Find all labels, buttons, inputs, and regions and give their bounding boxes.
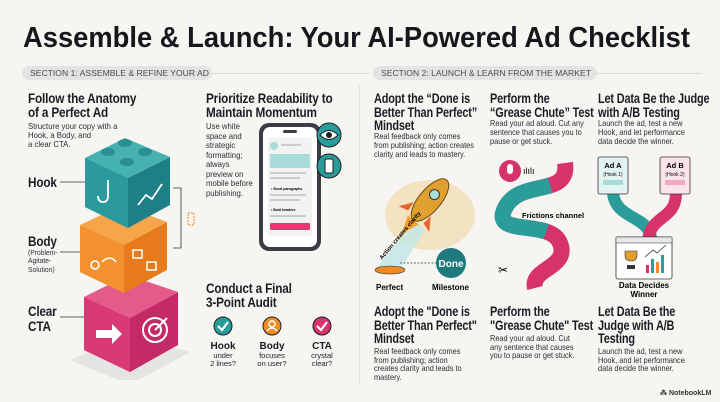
heading: chute	[490, 90, 594, 120]
heading: chute repeat: Perform the	[490, 303, 550, 319]
chart: a/b split: Data Decides	[619, 281, 670, 290]
icon: hook check: 2 lines?	[210, 359, 236, 368]
label: clear CTA: CTA	[28, 318, 51, 334]
heading: anatomy	[28, 90, 136, 120]
panel: anatomy	[28, 90, 136, 334]
text: done repeat: creates clarity and leads to	[374, 364, 462, 373]
heading: chute: Perform the	[490, 90, 550, 106]
heading: chute: “Grease Chute” Test	[490, 104, 594, 120]
section 1 header: SECTION 1: ASSEMBLE & REFINE YOUR AD	[30, 68, 209, 78]
heading: done: Better Than Perfect”	[374, 104, 477, 120]
icon: CTA check	[311, 316, 333, 368]
text: chute: Read your ad aloud. Cut any	[490, 119, 584, 128]
heading: audit	[206, 280, 292, 310]
text: done repeat: from publishing; action	[374, 356, 448, 365]
chart: a/b split: Ad A	[604, 161, 622, 170]
text: chute repeat: any sentence that causes	[490, 343, 574, 352]
heading: done repeat: Adopt the "Done is	[374, 303, 470, 319]
label: body: Agitate-	[28, 256, 51, 265]
heading: done repeat: Better Than Perfect"	[374, 316, 477, 332]
label: body: (Problem-	[28, 248, 58, 256]
text: chute: pause or get stuck.	[490, 137, 552, 146]
text: ab repeat: Launch the ad, test a new	[598, 347, 682, 356]
icon: phone mockup: • Bold headers	[271, 208, 295, 212]
chart: a/b split: Ad B	[666, 161, 684, 170]
label: hook: Hook	[28, 174, 57, 190]
heading: chute repeat: "Grease Chute" Test	[490, 316, 593, 332]
chart: chute: ılılı	[523, 166, 535, 176]
panel: done mindset repeat	[374, 303, 477, 382]
label: body: Solution)	[28, 264, 55, 274]
heading: ab repeat: Testing	[598, 330, 635, 346]
panel: audit	[206, 280, 333, 368]
text: readability: space and	[206, 130, 242, 140]
heading: readability: Maintain Momentum	[206, 104, 317, 120]
text: done repeat: mastery.	[374, 373, 402, 382]
text: readability: always	[206, 159, 230, 169]
heading: anatomy: Follow the Anatomy	[28, 90, 136, 106]
heading: readability: Prioritize Readability to	[206, 90, 332, 106]
text: readability: mobile before	[206, 178, 253, 188]
text: ab repeat: data decide the winner.	[598, 364, 674, 373]
text: anatomy: a clear CTA.	[28, 139, 70, 149]
text: anatomy	[28, 121, 118, 149]
text: ab	[598, 119, 685, 146]
heading: anatomy: of a Perfect Ad	[28, 104, 108, 120]
text: done repeat	[374, 347, 462, 382]
chart: chute	[494, 160, 584, 290]
text: ab: data decide the winner.	[598, 137, 674, 146]
text: chute repeat: you to pause or get stuck.	[490, 351, 574, 360]
heading: ab: with A/B Testing	[598, 104, 680, 120]
text: ab: Launch the ad, test a new	[598, 119, 682, 128]
heading: ab	[598, 90, 710, 120]
icon: hook check	[210, 316, 236, 368]
text: chute repeat	[490, 334, 574, 360]
heading: done	[374, 90, 477, 133]
text: ab: Hook, and let performance	[598, 128, 685, 137]
chart: rocket: Milestone	[432, 283, 469, 292]
icon: mobile	[316, 154, 342, 178]
icon: body user: Body	[260, 341, 284, 352]
icon: hook check: under	[213, 351, 233, 360]
chart: rocket: Perfect	[376, 283, 403, 292]
chart: chute: Frictions channel	[522, 211, 584, 220]
heading: done repeat: Mindset	[374, 330, 414, 346]
heading: done: Adopt the “Done is	[374, 90, 470, 106]
text: readability: strategic	[206, 140, 235, 150]
chart: lego stack	[60, 138, 194, 380]
icon: phone mockup	[259, 123, 321, 251]
panel: readability	[206, 90, 332, 198]
text: readability	[206, 121, 253, 198]
text: done: Real feedback only comes	[374, 132, 460, 141]
text: chute: sentence that causes you to	[490, 128, 582, 137]
heading: ab repeat	[598, 303, 675, 346]
icon: body user	[257, 316, 287, 368]
text: done: from publishing; action creates	[374, 141, 474, 150]
label: body: Body	[28, 233, 57, 249]
text: readability: publishing.	[206, 188, 243, 198]
heading: ab repeat: Judge with A/B	[598, 316, 674, 332]
icon: hook check: Hook	[210, 341, 236, 352]
heading: audit: Conduct a Final	[206, 280, 292, 296]
heading: audit: 3-Point Audit	[206, 294, 277, 310]
icon: body user: focuses	[259, 351, 285, 360]
text: done repeat: Real feedback only comes	[374, 347, 460, 356]
icon: body user: on user?	[257, 359, 287, 368]
text: ab repeat	[598, 348, 685, 374]
chart: rocket: Done	[438, 259, 464, 270]
text: readability: preview on	[206, 168, 243, 178]
chart: a/b split: (Hook 1)	[603, 172, 623, 178]
text: chute repeat: Read your ad aloud. Cut	[490, 334, 570, 343]
icon: CTA check: clear?	[312, 359, 332, 368]
icon: CTA check: CTA	[312, 341, 332, 352]
text: anatomy: Structure your copy with a	[28, 121, 117, 131]
panel: A/B testing	[598, 90, 710, 146]
panel: done mindset	[374, 90, 477, 159]
chart: rocket: Action creates clarity	[379, 210, 423, 261]
chart: chute: ✂	[498, 263, 508, 277]
panel: ab repeat	[598, 303, 685, 373]
section 2 header: SECTION 2: LAUNCH & LEARN FROM THE MARKET	[381, 68, 591, 78]
text: done: clarity and leads to mastery.	[374, 150, 465, 159]
heading: done repeat	[374, 303, 477, 346]
text: readability: Use white	[206, 121, 240, 131]
icon: CTA check: crystal	[311, 351, 333, 360]
panel: chute repeat	[490, 303, 594, 360]
icon: eye	[316, 122, 342, 148]
text: readability: formatting;	[206, 150, 243, 160]
chart: a/b split	[598, 156, 690, 298]
text: ab repeat: Hook, and let performance	[598, 356, 685, 365]
panel: grease chute	[490, 90, 594, 146]
heading: ab repeat: Let Data Be the	[598, 303, 675, 319]
text: anatomy: Hook, a Body, and	[28, 130, 91, 140]
chart: rocket	[374, 178, 475, 292]
label: clear CTA: Clear	[28, 303, 57, 319]
heading: readability	[206, 90, 332, 120]
label: clear CTA	[28, 303, 57, 334]
chart: a/b split: (Hook 2)	[665, 172, 685, 178]
heading: ab: Let Data Be the Judge	[598, 90, 709, 106]
heading: done: Mindset	[374, 117, 414, 133]
logo: NotebookLM: ⁂ NotebookLM	[660, 390, 711, 397]
text: chute	[490, 119, 584, 146]
heading: chute repeat	[490, 303, 594, 332]
text: done	[374, 132, 474, 159]
label: body	[28, 233, 58, 274]
icon: phone mockup: • Short paragraphs	[271, 187, 302, 191]
